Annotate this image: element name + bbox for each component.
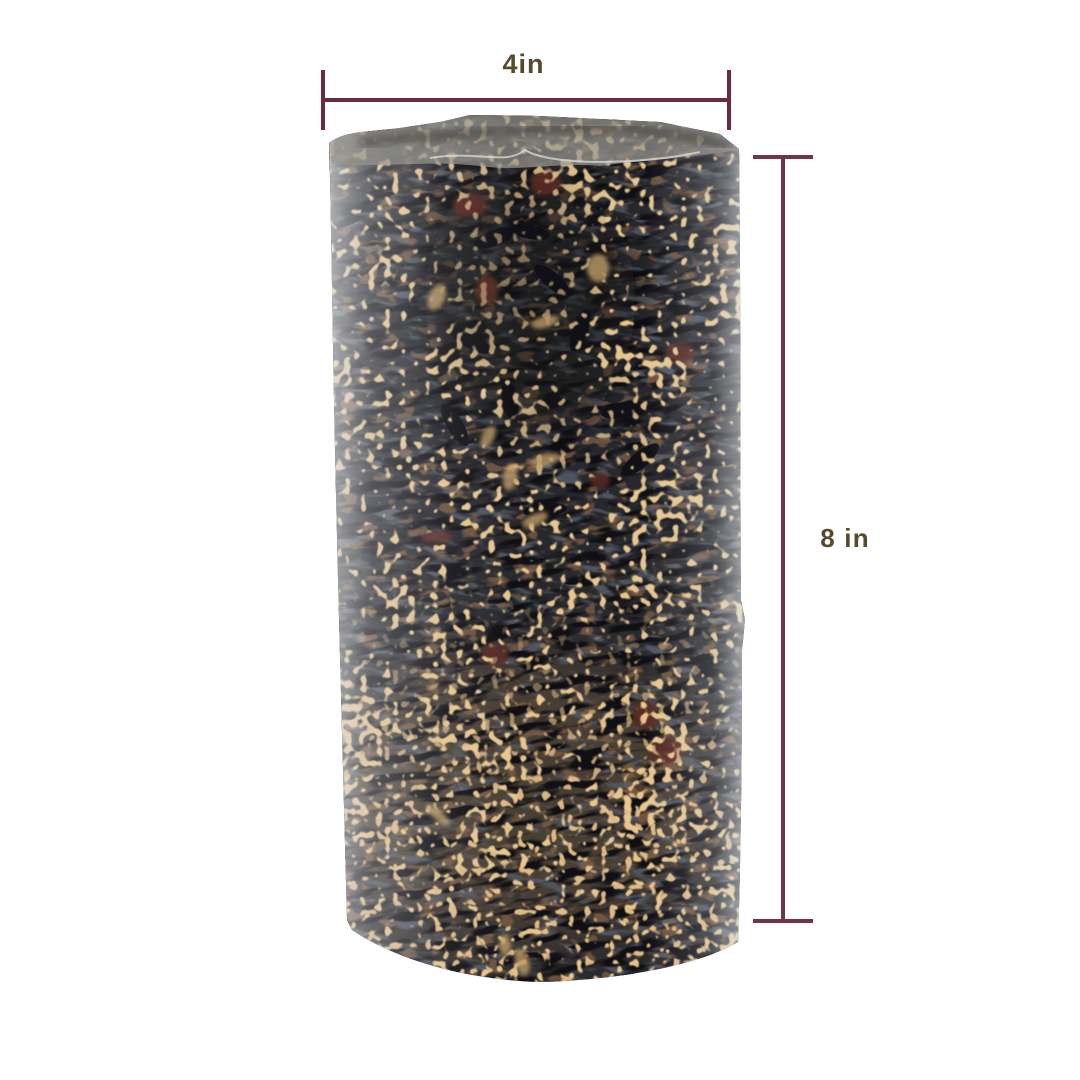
pale sunflower kernels <box>423 254 609 977</box>
dark upper centre patch <box>425 160 635 440</box>
husk and fruit pieces <box>320 105 760 985</box>
grey sunflower seed texture <box>329 115 744 980</box>
millet seed speckle <box>320 105 760 985</box>
warmer lower half <box>330 650 710 950</box>
black seed texture <box>329 115 745 982</box>
extra millet in the lower half <box>340 560 742 982</box>
width label: 4in <box>502 49 545 79</box>
base dark body <box>320 105 760 985</box>
cylinder of bird seed <box>329 115 745 982</box>
translucent wrapped top <box>329 115 739 168</box>
height bracket <box>753 157 813 921</box>
height label: 8 in <box>820 523 870 553</box>
red-brown fruit pieces <box>421 170 695 764</box>
glossy black seeds upper centre <box>436 222 664 519</box>
width bracket <box>323 70 729 130</box>
side haze from plastic wrap <box>330 105 745 985</box>
